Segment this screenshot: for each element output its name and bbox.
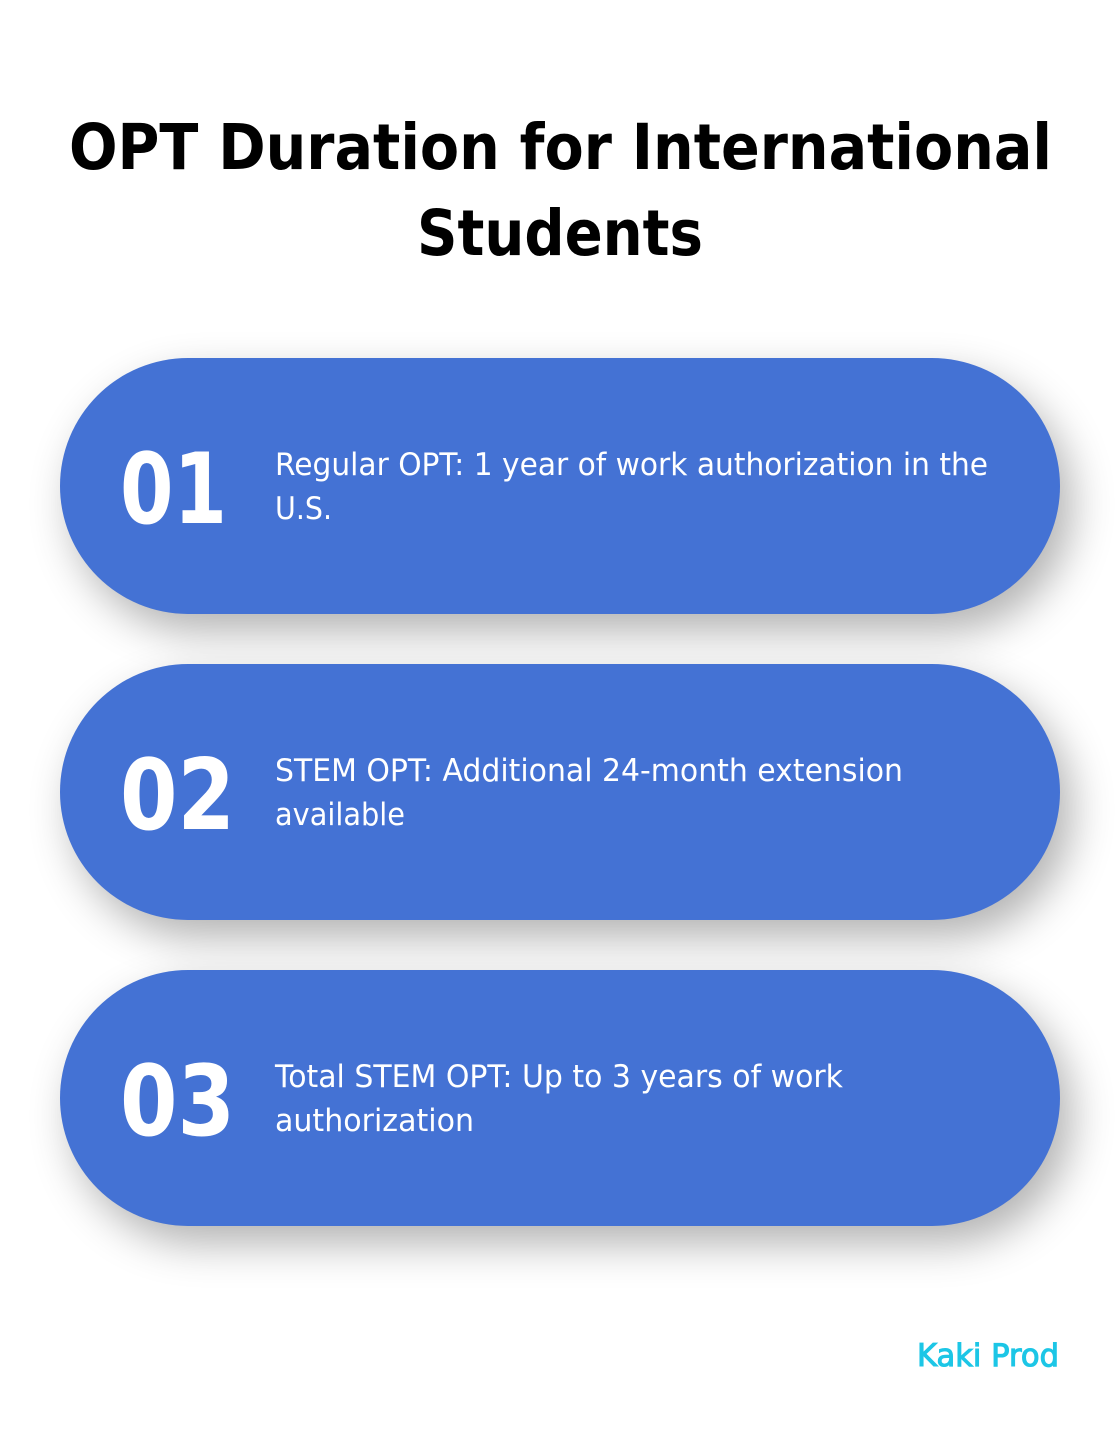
text: STEM OPT — [275, 753, 903, 833]
text: total STEM OPT — [274, 1059, 843, 1139]
title — [69, 111, 1052, 270]
number 03: 03 — [120, 1045, 235, 1159]
title: Students — [417, 197, 703, 270]
text: total STEM OPT: Total STEM OPT: Up to 3 years of work — [274, 1059, 843, 1095]
text: regular OPT — [275, 447, 988, 527]
text: total STEM OPT: authorization — [275, 1103, 474, 1139]
number 01: 01 — [120, 433, 227, 547]
panel: step 03 — [60, 970, 1060, 1226]
text: STEM OPT: available — [275, 797, 405, 833]
text: regular OPT: U.S. — [275, 491, 332, 527]
panel: step 01 — [60, 358, 1060, 614]
text: STEM OPT: STEM OPT: Additional 24-month extension — [275, 753, 903, 789]
panel: step 02 — [60, 664, 1060, 920]
text: regular OPT: Regular OPT: 1 year of work authorization in the — [275, 447, 988, 483]
number 02: 02 — [120, 739, 235, 853]
logo: Kaki Prod: Kaki Prod — [917, 1338, 1059, 1374]
